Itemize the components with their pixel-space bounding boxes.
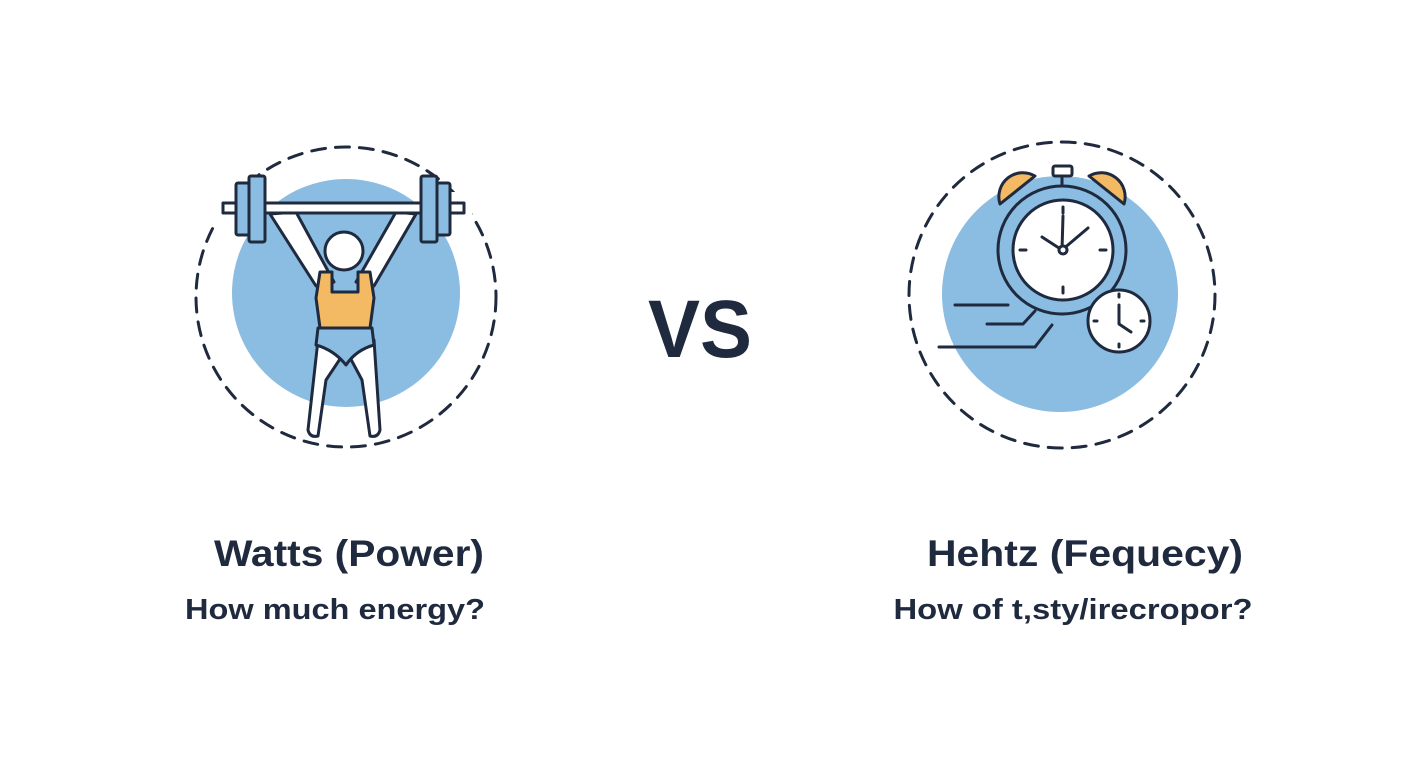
arms	[270, 212, 334, 286]
legs	[308, 340, 346, 436]
torso	[316, 272, 374, 328]
speed lines	[939, 305, 1052, 347]
head	[325, 232, 363, 270]
text: how often: How of t‚sty/irecropor?	[894, 594, 1252, 626]
text: how much energy: How much energy?	[185, 594, 485, 626]
icon: weightlifter	[196, 147, 496, 447]
bar	[223, 203, 464, 213]
shorts	[316, 328, 374, 365]
small clock	[1088, 290, 1150, 352]
heading: hertz: Hehtz (Fequecy)	[927, 533, 1243, 574]
bells	[999, 173, 1035, 204]
heading: watts: Watts (Power)	[214, 533, 484, 574]
icon: alarm clock	[909, 142, 1215, 448]
title: VS: VS	[648, 284, 752, 375]
